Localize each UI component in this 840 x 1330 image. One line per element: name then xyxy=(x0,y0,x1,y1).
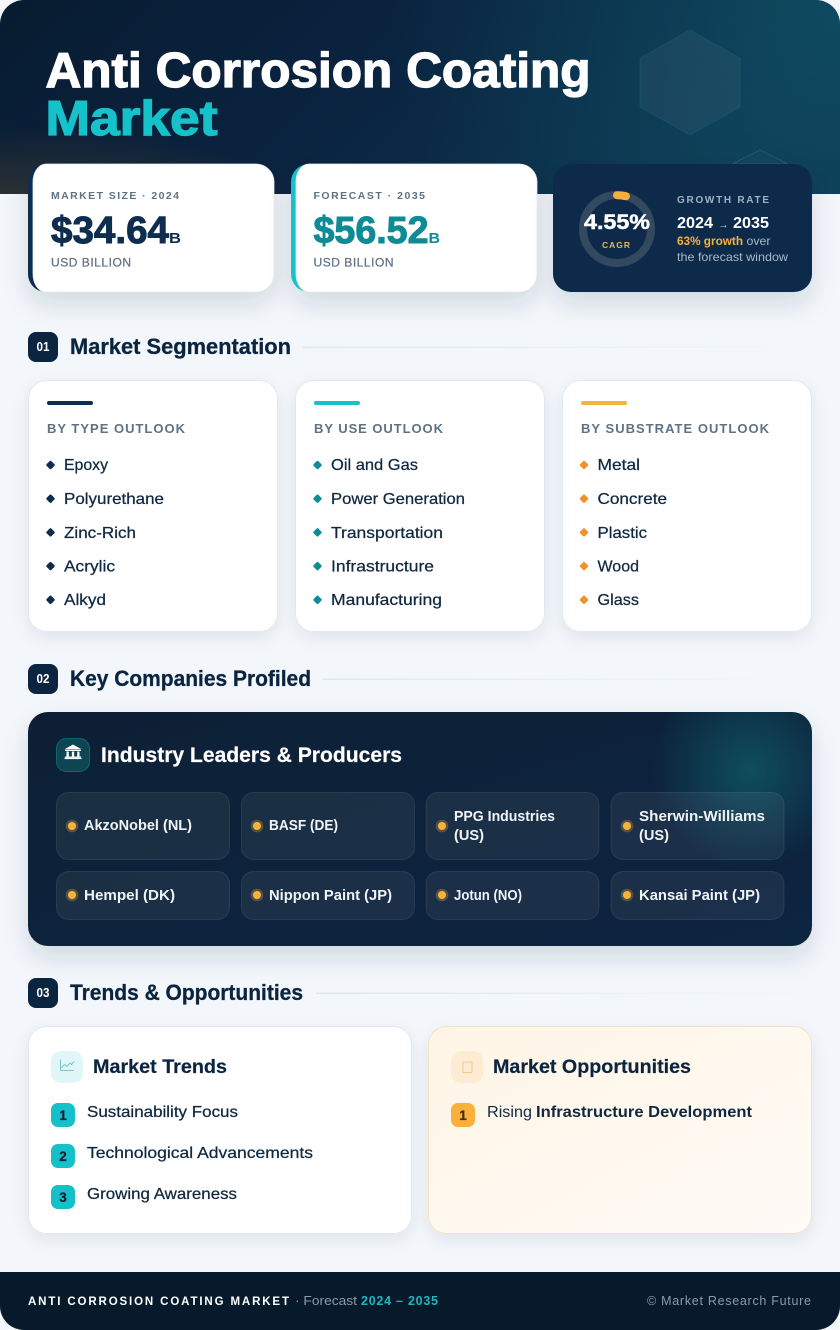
footer credit: © Market Research Future xyxy=(647,1294,811,1308)
company chip: Nippon Paint xyxy=(242,872,414,920)
type list: Polyurethane xyxy=(64,491,164,508)
trend 1: 1 xyxy=(59,1108,67,1123)
panel: by substrate outlook xyxy=(562,380,812,632)
company chip: Hempel xyxy=(56,872,230,920)
stat card: market size 2024 xyxy=(28,164,274,292)
section heading: key companies profiled xyxy=(28,664,773,694)
unit suffix: B xyxy=(169,230,181,247)
panel: by type outlook: BY TYPE OUTLOOK xyxy=(47,421,186,436)
header banner xyxy=(0,0,840,194)
panel: by use outlook xyxy=(296,380,544,632)
type list: Epoxy xyxy=(64,457,108,474)
type list xyxy=(46,457,164,609)
company chip: PPG Industries: PPG Industries xyxy=(454,809,555,825)
CAGR ring: CAGR xyxy=(602,240,630,250)
company chip: Hempel: Hempel (DK) xyxy=(84,888,175,904)
section heading: key companies profiled: Key Companies Profiled xyxy=(70,666,311,691)
use list xyxy=(313,457,465,609)
period: 2024 xyxy=(677,215,713,232)
section heading: trends and opportunities: Trends & Opportunities xyxy=(70,980,303,1005)
company chip: Jotun xyxy=(426,872,599,920)
section heading: market segmentation: Market Segmentation xyxy=(70,334,291,359)
company chip: Sherwin-Williams: Sherwin-Williams xyxy=(639,809,765,825)
use list: Power Generation xyxy=(331,491,465,508)
section heading: market segmentation: 01 xyxy=(36,340,50,354)
icon: line chart xyxy=(51,1051,83,1083)
substrate list: Glass xyxy=(598,592,639,609)
section heading: key companies profiled: 02 xyxy=(36,672,50,686)
opportunity 1: Infrastructure Development xyxy=(536,1104,753,1121)
stat card: growth rate xyxy=(553,164,812,292)
title xyxy=(46,44,590,146)
card heading: Market Opportunities xyxy=(493,1056,691,1078)
use list: Infrastructure xyxy=(331,558,434,576)
decorative hexagon xyxy=(640,30,740,135)
growth description xyxy=(677,234,788,264)
value: $34.64 xyxy=(51,210,169,252)
company chip: PPG Industries: (US) xyxy=(454,828,484,844)
panel: market opportunities xyxy=(428,1026,812,1234)
decorative triangle xyxy=(732,150,788,164)
company chip: BASF: BASF (DE) xyxy=(269,818,338,834)
footer period: 2024 – 2035 xyxy=(361,1294,438,1308)
substrate list: Metal xyxy=(598,457,640,474)
panel: industry leaders and producers xyxy=(28,712,812,946)
type list: Alkyd xyxy=(64,592,106,609)
unit: USD BILLION xyxy=(314,256,394,270)
section heading: trends and opportunities: 03 xyxy=(36,986,50,1000)
label: MARKET SIZE · 2024 xyxy=(51,190,179,202)
use list: Transportation xyxy=(331,525,443,542)
growth label: GROWTH RATE xyxy=(677,195,769,206)
use list: Manufacturing xyxy=(331,592,442,609)
company chip: AkzoNobel: AkzoNobel (NL) xyxy=(84,818,192,834)
opportunity 1: 1 xyxy=(459,1108,467,1123)
company chip: Sherwin-Williams: (US) xyxy=(639,828,669,844)
growth description: over xyxy=(746,234,771,248)
period: 2035 xyxy=(733,215,769,232)
use list: Oil and Gas xyxy=(331,457,418,474)
card heading: Market Trends xyxy=(93,1056,227,1078)
opportunity 1 xyxy=(451,1103,753,1127)
panel: market trends xyxy=(28,1026,412,1234)
panel: by use outlook: BY USE OUTLOOK xyxy=(314,421,444,436)
footer xyxy=(0,1272,840,1330)
CAGR ring: 4.55% xyxy=(584,211,650,234)
period: → xyxy=(718,219,728,231)
trend 3 xyxy=(51,1185,237,1209)
company chip: Nippon Paint: Nippon Paint (JP) xyxy=(269,888,392,904)
trend 1: Sustainability Focus xyxy=(87,1104,238,1121)
unit suffix: B xyxy=(428,230,440,247)
label: FORECAST · 2035 xyxy=(314,190,425,202)
value: $56.52 xyxy=(314,210,428,252)
trend 3: 3 xyxy=(59,1190,67,1205)
panel: by substrate outlook: BY SUBSTRATE OUTLOOK xyxy=(581,421,770,436)
company chip: BASF xyxy=(242,792,414,860)
title: Anti Corrosion Coating xyxy=(46,44,590,98)
company chip: PPG Industries xyxy=(426,792,599,860)
CAGR ring xyxy=(583,195,651,263)
stat card: forecast 2035 xyxy=(291,164,537,292)
panel heading: Industry Leaders & Producers xyxy=(101,744,402,767)
company chip: Jotun: Jotun (NO) xyxy=(454,888,522,904)
period xyxy=(677,215,769,232)
growth description: the forecast window xyxy=(677,250,788,264)
company chip: Kansai Paint xyxy=(611,872,784,920)
footer forecast label: · Forecast xyxy=(295,1294,358,1308)
section heading: market segmentation xyxy=(28,332,812,362)
unit: USD BILLION xyxy=(51,256,131,270)
trend 2 xyxy=(51,1144,313,1168)
substrate list: Wood xyxy=(598,558,639,576)
icon: institution building xyxy=(56,738,90,772)
trend 2: Technological Advancements xyxy=(87,1145,313,1162)
opportunity 1: Rising xyxy=(487,1104,532,1121)
growth description: 63% growth xyxy=(677,234,743,248)
substrate list xyxy=(580,457,667,609)
type list: Zinc-Rich xyxy=(64,525,136,542)
icon: missing glyph box xyxy=(451,1051,483,1083)
title: Market xyxy=(46,92,218,146)
substrate list: Plastic xyxy=(598,525,647,542)
trend 2: 2 xyxy=(59,1149,67,1164)
company chip: Kansai Paint: Kansai Paint (JP) xyxy=(639,888,760,904)
substrate list: Concrete xyxy=(598,491,667,508)
company chip: Sherwin-Williams xyxy=(611,792,784,860)
panel: by type outlook xyxy=(28,380,278,632)
footer title: ANTI CORROSION COATING MARKET xyxy=(28,1296,289,1308)
section heading: trends and opportunities xyxy=(28,978,812,1008)
trend 1 xyxy=(51,1103,238,1127)
company chip: AkzoNobel xyxy=(56,792,230,860)
trend 3: Growing Awareness xyxy=(87,1186,237,1203)
type list: Acrylic xyxy=(64,558,115,576)
